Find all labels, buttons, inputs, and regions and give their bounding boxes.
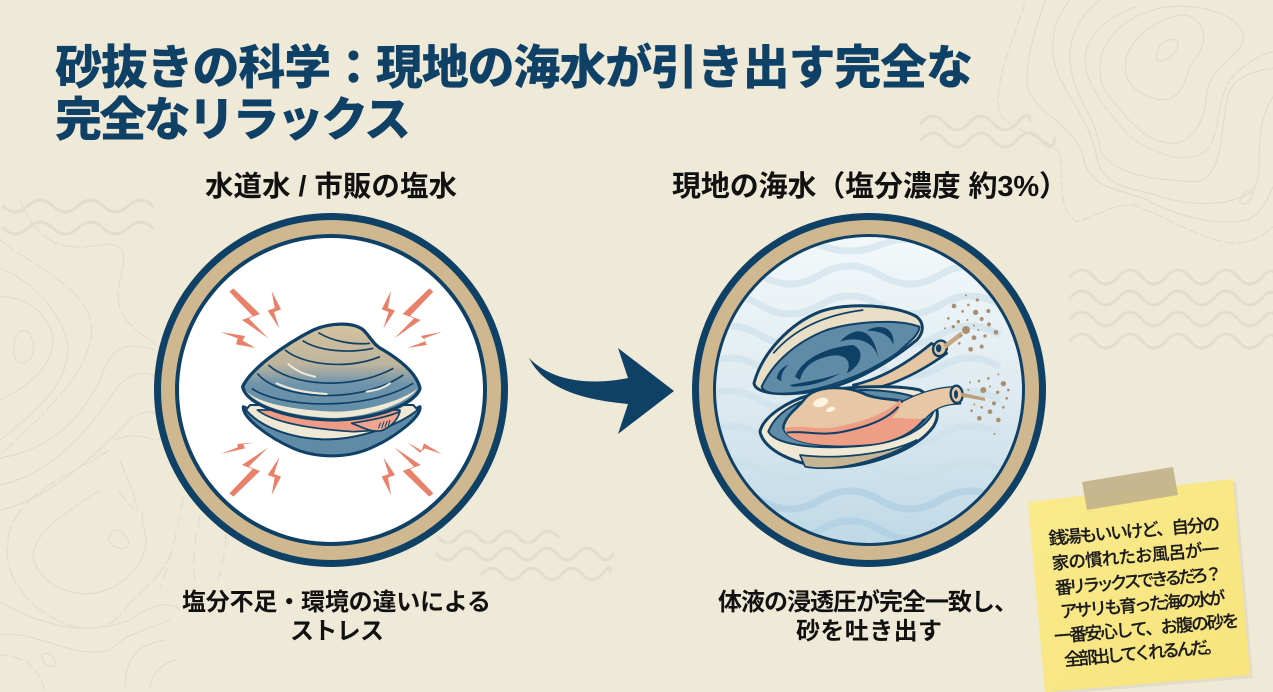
title: 砂抜きの科学：現地の海水が引き出す完全な bbox=[55, 41, 973, 94]
note text: 全部出してくれるんだ。 bbox=[1063, 636, 1223, 670]
icon: closed clam bbox=[243, 324, 420, 456]
note text: 家の慣れたお風呂が一 bbox=[1051, 539, 1220, 574]
note text bbox=[1045, 513, 1242, 671]
title: 完全なリラックス bbox=[55, 93, 411, 146]
note text: アサリも育った海の水が bbox=[1059, 588, 1227, 622]
left caption bbox=[182, 589, 491, 645]
right caption: 砂を吐き出す bbox=[796, 618, 942, 645]
right heading: 現地の海水（塩分濃度 約3%） bbox=[672, 170, 1068, 203]
title bbox=[55, 41, 973, 146]
left caption: ストレス bbox=[290, 618, 384, 645]
left heading: 水道水 / 市販の塩水 bbox=[205, 171, 457, 203]
background wave lines bbox=[3, 115, 1273, 580]
seawater waves bbox=[700, 239, 1000, 539]
sticky note bbox=[1028, 467, 1253, 692]
left caption: 塩分不足・環境の違いによる bbox=[182, 589, 491, 616]
right caption bbox=[718, 588, 1018, 645]
icon: expelled sand particles bbox=[943, 294, 1010, 435]
note text: 番リラックスできるだろ？ bbox=[1054, 564, 1223, 598]
note text: 銭湯もいいけど、自分の bbox=[1048, 514, 1221, 549]
note text: 一番安心して、お腹の砂を bbox=[1053, 611, 1240, 647]
tape bbox=[1082, 467, 1178, 510]
arrow bbox=[529, 348, 674, 434]
panel: relaxed clam circle bbox=[692, 213, 1046, 567]
icon: stress lightning bolts bbox=[221, 288, 442, 497]
panel: stressed clam circle bbox=[154, 213, 508, 567]
right caption: 体液の浸透圧が完全一致し、 bbox=[718, 588, 1018, 616]
icon: open clam with siphons bbox=[754, 306, 963, 468]
